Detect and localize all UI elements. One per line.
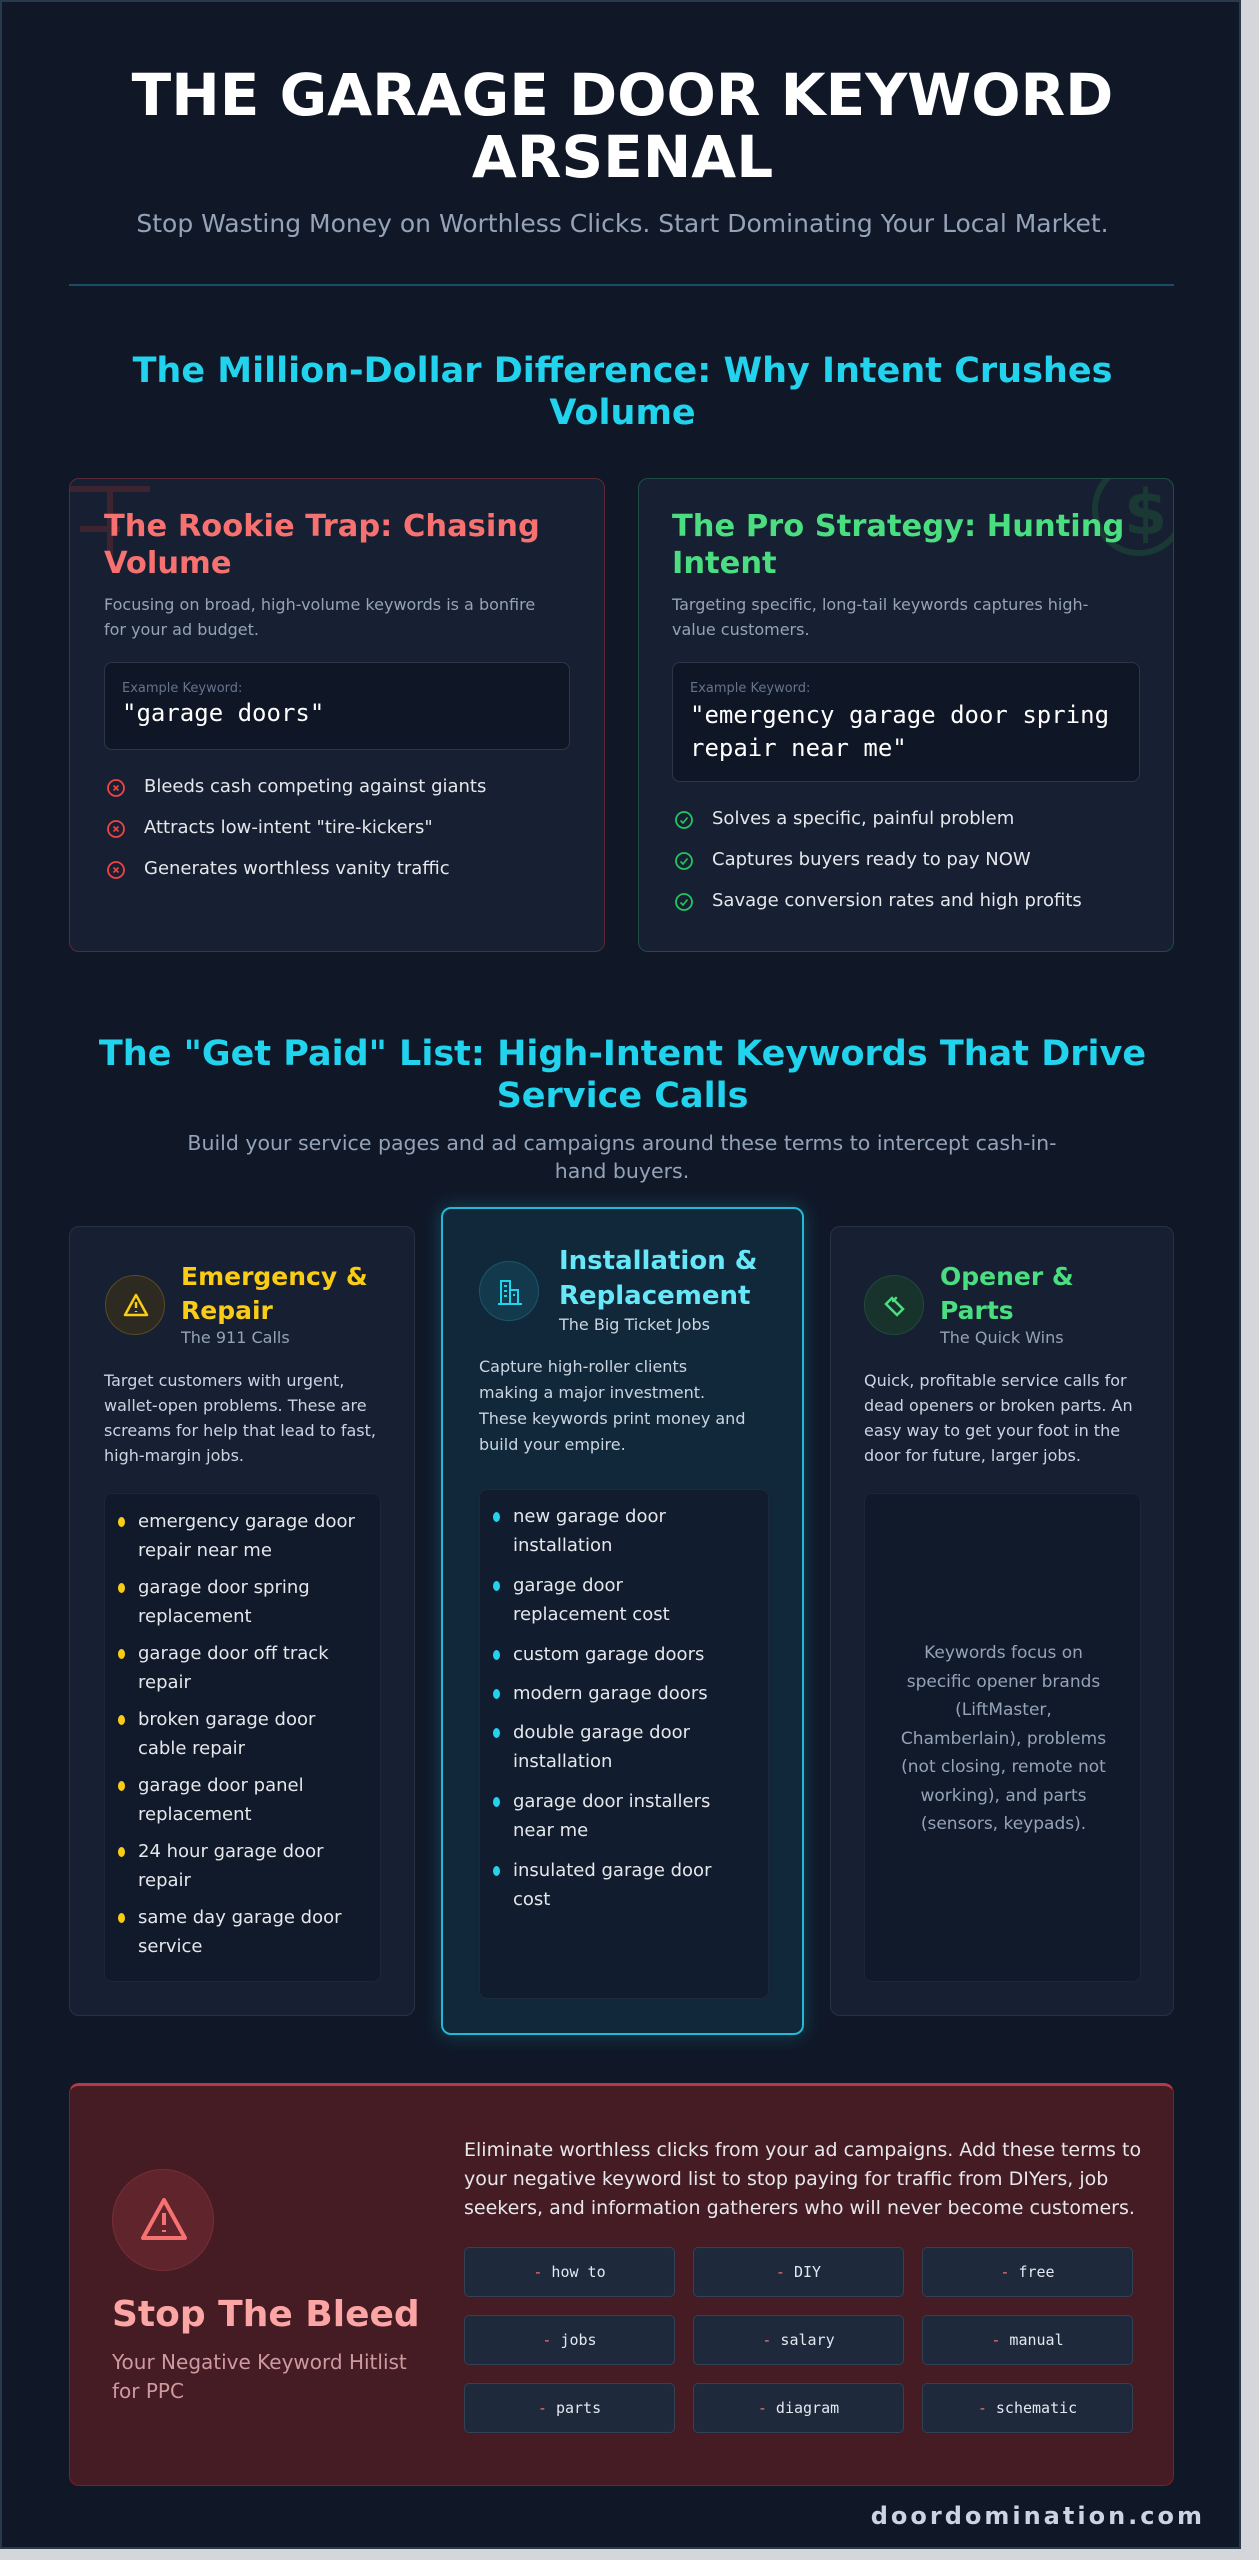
example keyword: Example Keyword: (690, 681, 810, 696)
description: Target customers with urgent, wallet-open problems. These are screams for help that lead to fast, high-margin jobs. (104, 1371, 376, 1465)
negative keyword grid: - parts (538, 2399, 601, 2417)
section heading: million-dollar difference: Volume (549, 393, 696, 433)
keyword list: replacement (138, 1606, 252, 1627)
section subtitle (187, 1131, 1057, 1183)
keyword note box: Keywords focus on (924, 1643, 1083, 1663)
list: benefits: Solves a specific, painful problem (712, 808, 1014, 829)
keyword list: repair (138, 1672, 191, 1693)
keyword note box: (not closing, remote not (901, 1757, 1106, 1777)
panel: installation & replacement (featured) (441, 1207, 804, 2035)
list: downsides: Generates worthless vanity traffic (144, 858, 450, 879)
example keyword (104, 662, 570, 750)
heading: Volume (104, 546, 232, 581)
heading: Installation & (559, 1246, 757, 1276)
keyword list: 24 hour garage door (138, 1841, 324, 1862)
description (478, 1357, 745, 1454)
negative keyword grid: - manual (991, 2331, 1064, 2349)
description: build your empire. (479, 1435, 626, 1454)
section heading: get paid list (99, 1034, 1146, 1116)
negative keyword grid: - jobs (542, 2331, 597, 2349)
keyword list (104, 1493, 381, 1982)
keyword list: garage door spring (138, 1577, 310, 1598)
example keyword: "emergency garage door spring repair near me" (690, 701, 1109, 762)
description: seekers, and information gatherers who will never become customers. (464, 2197, 1135, 2219)
keyword note box: working), and parts (920, 1786, 1086, 1806)
panel: emergency & repair (69, 1226, 415, 2016)
keyword list: insulated garage door (513, 1860, 711, 1881)
keyword list: same day garage door (138, 1907, 342, 1928)
keyword list: new garage door (513, 1506, 666, 1527)
negative keyword grid: - DIY (776, 2263, 821, 2281)
section subtitle: hand buyers. (555, 1159, 689, 1183)
keyword list (479, 1489, 769, 1999)
section heading: million-dollar difference (132, 351, 1112, 433)
keyword list: emergency garage door (138, 1511, 355, 1532)
icon: building (479, 1261, 539, 1321)
heading (104, 509, 540, 581)
negative keyword grid: - diagram (758, 2399, 839, 2417)
panel: stop the bleed (69, 2083, 1174, 2486)
icon: pill/parts (864, 1275, 924, 1335)
keyword list: garage door panel (138, 1775, 304, 1796)
negative keyword grid (464, 2247, 1133, 2433)
icon: faint chart decoration (70, 486, 150, 559)
description (464, 2139, 1141, 2219)
keyword list: garage door off track (138, 1643, 329, 1664)
list: benefits: Captures buyers ready to pay NOW (712, 849, 1031, 870)
keyword list: replacement (138, 1804, 252, 1825)
keyword list: custom garage doors (513, 1644, 704, 1665)
heading: Replacement (559, 1281, 750, 1311)
section heading: get paid list: Service Calls (497, 1076, 748, 1116)
description: These keywords print money and (479, 1409, 745, 1428)
heading: Repair (181, 1296, 273, 1325)
keyword note box: Chamberlain), problems (901, 1728, 1106, 1748)
description: making a major investment. (479, 1383, 705, 1402)
icon: warning (105, 1275, 165, 1335)
negative keyword grid: - how to (533, 2263, 606, 2281)
keyword list: cable repair (138, 1738, 245, 1759)
example keyword (672, 662, 1140, 782)
keyword list: installation (513, 1535, 612, 1556)
panel: rookie trap (69, 478, 605, 952)
heading (672, 509, 1124, 581)
section subtitle: Build your service pages and ad campaigns around these terms to intercept cash-in- (187, 1131, 1057, 1155)
list: downsides: Bleeds cash competing against giants (144, 776, 486, 797)
negative keyword grid: - free (1000, 2263, 1055, 2281)
panel: opener & parts: The Quick Wins (940, 1328, 1064, 1347)
negative keyword grid: - salary (762, 2331, 835, 2349)
heading: Emergency & (181, 1262, 368, 1291)
keyword list: repair (138, 1870, 191, 1891)
list: benefits (675, 808, 1082, 911)
description: your negative keyword list to stop paying for traffic from DIYers, job (464, 2168, 1108, 2190)
keyword list: near me (513, 1820, 588, 1841)
heading: The Rookie Trap: Chasing (104, 509, 540, 544)
keyword list: repair near me (138, 1540, 272, 1561)
keyword note box: (LiftMaster, (955, 1700, 1052, 1720)
icon: warning circle (112, 2169, 214, 2271)
subtitle: Stop Wasting Money on Worthless Clicks. Start Dominating Your Local Market. (136, 209, 1109, 238)
list: downsides (107, 776, 486, 879)
title: THE GARAGE DOOR KEYWORD (132, 61, 1113, 129)
heading: Stop The Bleed (112, 2294, 420, 2335)
description: Focusing on broad, high-volume keywords is a bonfire for your ad budget. (104, 595, 535, 639)
description: Capture high-roller clients (479, 1357, 687, 1376)
keyword list: cost (513, 1889, 550, 1910)
list: benefits: Savage conversion rates and high profits (712, 890, 1082, 911)
keyword note box: (sensors, keypads). (921, 1814, 1086, 1834)
keyword note box (864, 1493, 1141, 1982)
description: Targeting specific, long-tail keywords captures high-value customers. (672, 595, 1088, 639)
icon: faint dollar decoration (1092, 478, 1173, 556)
keyword list: garage door installers (513, 1791, 710, 1812)
keyword list: service (138, 1936, 202, 1957)
list: downsides: Attracts low-intent "tire-kickers" (144, 817, 433, 838)
keyword list: garage door (513, 1575, 623, 1596)
heading: Intent (672, 546, 777, 581)
keyword list: broken garage door (138, 1709, 315, 1730)
example keyword: Example Keyword: (122, 681, 242, 696)
panel: installation & replacement (featured): The Big Ticket Jobs (559, 1315, 710, 1334)
keyword list: installation (513, 1751, 612, 1772)
footer brand: doordomination.com (871, 2502, 1205, 2530)
heading (940, 1262, 1074, 1325)
heading: Parts (940, 1296, 1014, 1325)
section heading: get paid list: The "Get Paid" List: High-Intent Keywords That Drive (99, 1034, 1146, 1074)
panel: opener & parts (830, 1226, 1174, 2016)
keyword note box: specific opener brands (907, 1672, 1100, 1692)
negative keyword grid: - schematic (978, 2399, 1077, 2417)
title: ARSENAL (472, 123, 773, 191)
description: Quick, profitable service calls for dead openers or broken parts. An easy way to get your foot in the door for future, larger jobs. (864, 1371, 1133, 1465)
panel: stop the bleed: Your Negative Keyword Hitlist for PPC (112, 2350, 407, 2403)
example keyword: "garage doors" (122, 699, 324, 727)
keyword list: replacement cost (513, 1604, 670, 1625)
heading (181, 1262, 368, 1325)
keyword list: double garage door (513, 1722, 690, 1743)
description: Eliminate worthless clicks from your ad campaigns. Add these terms to (464, 2139, 1141, 2161)
heading: Opener & (940, 1262, 1074, 1291)
keyword list: modern garage doors (513, 1683, 708, 1704)
icon: faint dollar decoration: $ (1124, 478, 1167, 549)
section heading: million-dollar difference: The Million-Dollar Difference: Why Intent Crushes (133, 351, 1112, 391)
title (132, 61, 1113, 191)
panel: pro strategy (638, 478, 1174, 952)
panel: emergency & repair: The 911 Calls (181, 1328, 290, 1347)
heading: The Pro Strategy: Hunting (672, 509, 1124, 544)
heading (559, 1246, 757, 1311)
